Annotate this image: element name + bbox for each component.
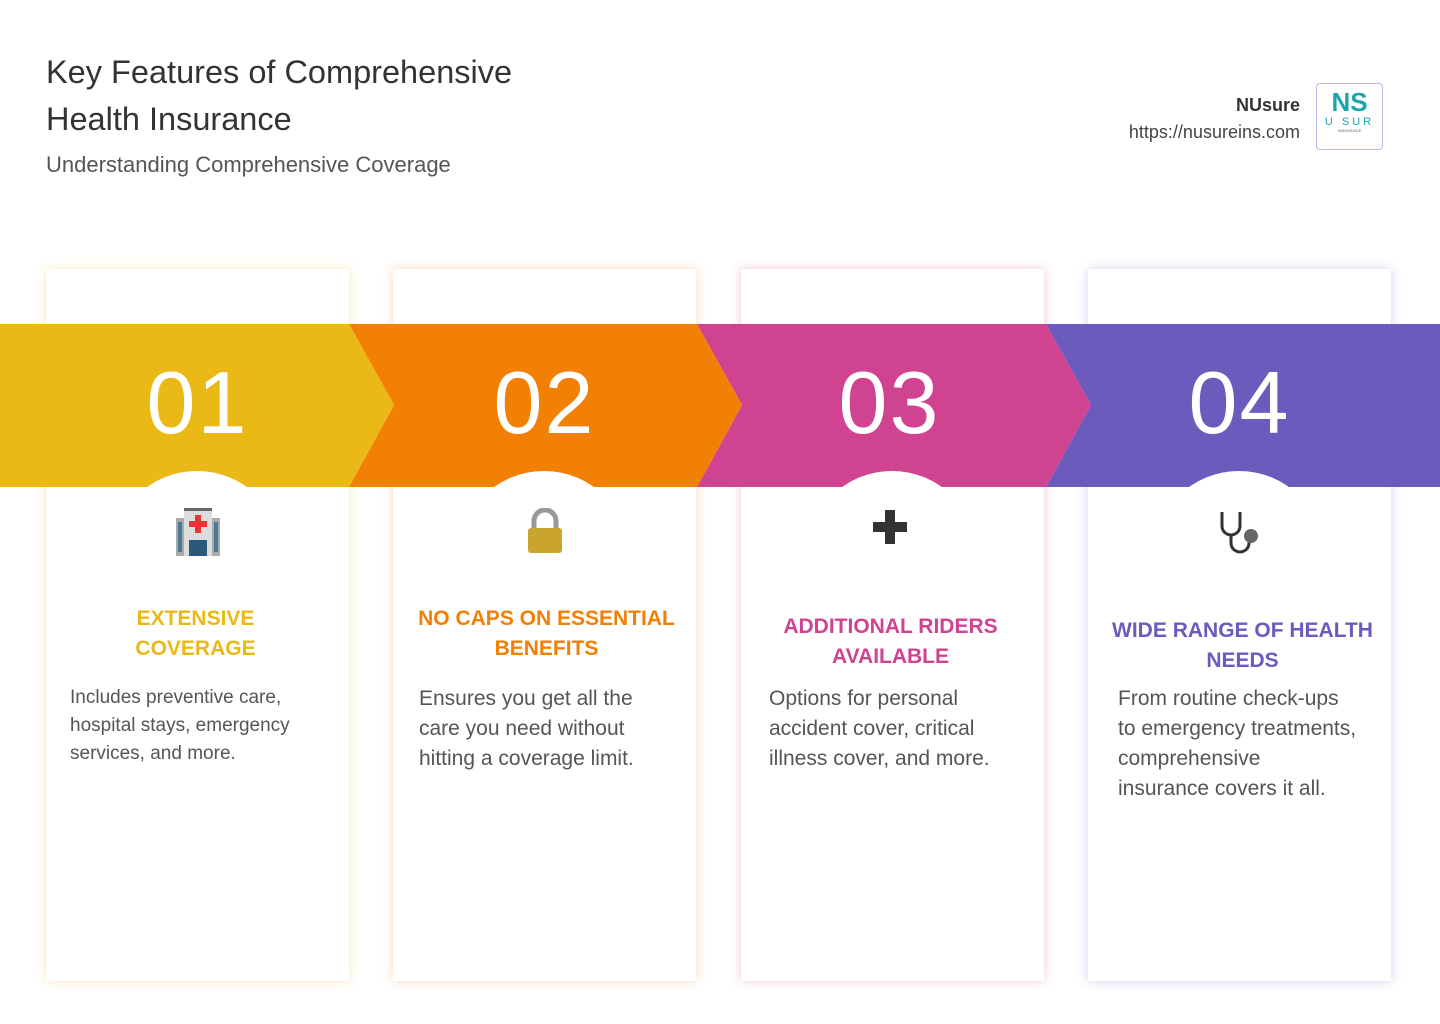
text: accident cover, critical: [769, 717, 974, 740]
card 1 text: EXTENSIVE: [137, 607, 254, 630]
card shadows: [46, 269, 349, 981]
text: insurance covers it all.: [1118, 777, 1326, 800]
numbers: 01: [147, 353, 248, 452]
card 4 text: NEEDS: [1206, 649, 1279, 672]
text: Options for personal: [769, 687, 958, 710]
text: comprehensive: [1118, 747, 1260, 770]
card 2 text: [418, 607, 675, 660]
icon: hospital: [176, 508, 220, 556]
logo: U SUR: [1325, 116, 1374, 128]
text: 03: [839, 353, 940, 452]
brand text: [1129, 95, 1300, 142]
text: hitting a coverage limit.: [419, 747, 634, 770]
text: hospital stays, emergency: [70, 715, 290, 736]
card 2 text: BENEFITS: [495, 637, 598, 660]
subtitle: Understanding Comprehensive Coverage: [46, 152, 451, 177]
text: 04: [1189, 353, 1290, 452]
text: services, and more.: [70, 743, 236, 764]
logo: [1316, 83, 1383, 150]
card 1 text: [135, 607, 256, 660]
text: From routine check-ups: [1118, 687, 1339, 710]
card 4 text: [1112, 619, 1373, 672]
logo: NS: [1331, 87, 1368, 117]
text: Includes preventive care,: [70, 687, 281, 708]
text: 02: [494, 353, 595, 452]
icon: stethoscope: [1220, 512, 1258, 554]
logo: INSURANCE: [1338, 128, 1361, 133]
card 1 text: COVERAGE: [135, 637, 256, 660]
icon: lock: [528, 508, 562, 553]
card 3 text: AVAILABLE: [832, 645, 949, 668]
title: Health Insurance: [46, 101, 292, 137]
card 2 text: NO CAPS ON ESSENTIAL: [418, 607, 675, 630]
text: Ensures you get all the: [419, 687, 633, 710]
icon: plus: [873, 510, 907, 544]
card 4 text: WIDE RANGE OF HEALTH: [1112, 619, 1373, 642]
title: [46, 54, 512, 137]
text: care you need without: [419, 717, 624, 740]
text: to emergency treatments,: [1118, 717, 1356, 740]
circles: [111, 471, 283, 643]
arrow band: [0, 324, 1440, 487]
text: illness cover, and more.: [769, 747, 990, 770]
card 3 text: ADDITIONAL RIDERS: [783, 615, 998, 638]
card 3 text: [783, 615, 998, 668]
brand text: NUsure: [1236, 95, 1300, 115]
brand text: https://nusureins.com: [1129, 122, 1300, 142]
title: Key Features of Comprehensive: [46, 54, 512, 90]
